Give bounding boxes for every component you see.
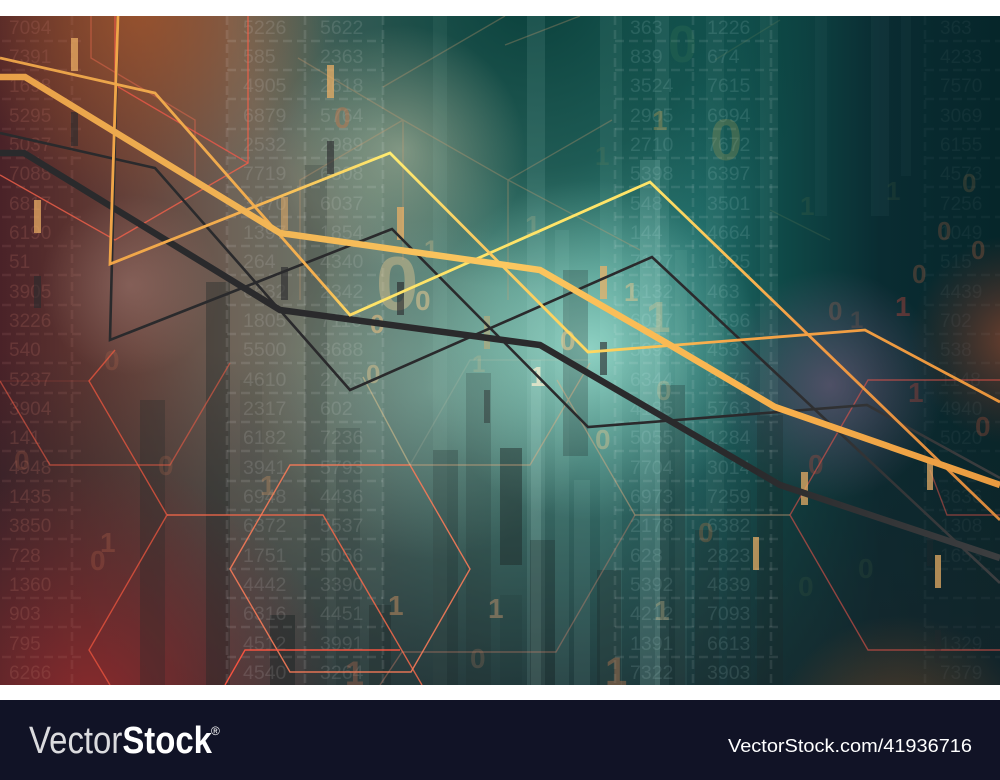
number table centre-left: 4442 [243,574,286,596]
number table centre-right: 839 [630,46,663,68]
number table centre-right: 3014 [707,457,751,479]
number table centre-right: 363 [630,17,663,39]
number table left: 6817 [9,194,51,215]
number table centre-left: 2618 [320,75,363,97]
number table right: 7256 [940,194,982,215]
number table centre-left: 5764 [320,105,364,127]
number table centre-right: 7259 [707,486,750,508]
binary digits overlay: 1 [488,593,504,624]
binary digits overlay: 0 [962,168,976,198]
binary digits overlay: 1 [654,595,670,626]
number table right [940,18,982,684]
binary digits overlay: 0 [595,424,611,455]
number table left: 5037 [9,135,51,156]
number table left: 540 [9,340,41,361]
number table centre-left: 7236 [320,427,363,449]
number table right: 1049 [940,223,982,244]
number table centre-right: 4839 [707,574,750,596]
number table left: 6266 [9,663,51,684]
number table centre-left: 7719 [243,163,286,185]
number table centre-left: 2989 [320,134,363,156]
number table centre-left: 6879 [243,105,286,127]
number table left: 141 [9,428,41,449]
number table centre-right: 7322 [630,662,673,684]
number table centre-right: 1391 [630,633,673,655]
number table right: 1329 [940,634,982,655]
number table centre-right: 2178 [630,515,673,537]
number table centre-left: 6037 [320,193,363,215]
number table centre-right: 4664 [707,222,751,244]
number table left: 51 [9,252,30,273]
number table centre-right: 4185 [630,398,674,420]
number table centre-left: 6308 [320,163,363,185]
number table centre-right [630,17,751,684]
number table centre-left: 1751 [243,545,286,567]
number table right: 4439 [940,282,982,303]
number table centre-left: 6372 [243,515,286,537]
number table right: 702 [940,311,972,332]
binary digits overlay: 0 [710,108,742,173]
binary digits overlay: 0 [14,445,30,476]
number table centre-left: 1805 [243,310,287,332]
number table centre-right: 5693 [630,339,673,361]
dashed table grid [2,16,778,683]
number table left: 1360 [9,575,51,596]
binary digits overlay: 0 [975,411,991,442]
number table centre-left: 4540 [243,662,287,684]
number table left: 1698 [9,76,51,97]
binary digits overlay: 0 [90,545,106,576]
binary digits overlay: 1 [624,277,638,307]
number table left: 5237 [9,370,51,391]
number table centre-right: 4212 [630,603,673,625]
binary digits overlay: 0 [366,359,380,389]
number table left: 7094 [9,18,52,39]
binary digits overlay: 1 [595,141,609,171]
footer image id: VectorStock.com/41936716 [728,736,972,756]
number table centre-left: 6182 [243,427,286,449]
binary digits overlay: 0 [698,517,714,548]
number table centre-right: 5398 [630,163,673,185]
binary digits overlay: 1 [605,650,627,694]
thick dark trend line [0,153,1000,558]
number table centre-right: 2710 [630,134,674,156]
number table centre-left: 3390 [320,574,364,596]
number table centre-left: 5793 [320,457,363,479]
number table centre-left: 2755 [320,369,364,391]
number table centre-left: 4451 [320,603,363,625]
number table left: 903 [9,604,41,625]
number table left: 7088 [9,164,51,185]
number table centre-left: 5500 [243,339,287,361]
binary digits overlay: 1 [800,191,814,221]
number table centre-right: 6973 [630,486,673,508]
binary digits overlay: 1 [908,377,924,408]
number table centre-right: 463 [707,281,740,303]
number table centre-right: 1226 [707,17,750,39]
number table centre-left: 3941 [243,457,286,479]
vertical light streaks [230,16,778,685]
number table left: 3850 [9,516,51,537]
binary digits overlay: 1 [345,655,364,693]
number table centre-left: 602 [320,398,353,420]
footer bar [0,700,1000,780]
number table centre-left: 2363 [320,46,363,68]
number table right: 1308 [940,516,982,537]
thin orange line chart [0,16,1000,520]
number table centre-right: 7672 [707,134,750,156]
binary digits overlay: 0 [104,345,120,376]
number table left: 7391 [9,47,51,68]
number table centre-left: 5622 [320,17,363,39]
number table centre-left: 2532 [243,134,286,156]
number table centre-left: 4436 [320,486,363,508]
binary digits overlay: 1 [424,236,438,264]
number table left: 5295 [9,106,51,127]
number table centre-left: 6632 [243,281,286,303]
number table centre-left: 1854 [320,222,364,244]
binary digits overlay: 1 [525,210,541,241]
number table left: 3904 [9,399,52,420]
number table centre-left: 2317 [243,398,286,420]
number table right: 6155 [940,135,982,156]
number table centre-left: 6316 [243,603,286,625]
number table right: 7379 [940,663,982,684]
binary digits overlay: 1 [652,105,668,136]
binary digits overlay: 1 [646,293,670,342]
binary digits overlay: 0 [656,375,672,406]
number table centre-right: 628 [630,545,663,567]
number table centre-left: 4610 [243,369,287,391]
number table centre-right: 7127 [630,251,673,273]
number table centre-left: 264 [243,251,276,273]
number table centre-right: 2905 [630,105,674,127]
number table centre-right: 6382 [707,515,750,537]
number table centre-left: 1397 [243,222,286,244]
number table centre-left: 3991 [320,633,363,655]
number table centre-right: 7615 [707,75,751,97]
binary digits overlay: 0 [470,643,486,674]
number table right: 5020 [940,428,982,449]
binary digits overlay: 0 [415,285,431,316]
number table right: 4573 [940,164,982,185]
thin dark line chart [0,16,1000,583]
number table centre-left: 5537 [320,515,363,537]
binary digits overlay: 1 [530,361,546,392]
number table left: 3905 [9,282,51,303]
number table centre-left: 7116 [320,310,362,332]
binary digits overlay: 1 [388,590,404,621]
number table centre-right: 1596 [707,310,750,332]
binary digits overlay: 0 [798,571,814,602]
registered mark: ® [211,724,220,738]
number table centre-right: 548 [630,193,663,215]
binary digits overlay: 0 [828,296,842,326]
number table centre-left: 5056 [320,545,363,567]
number table centre-left: 2342 [320,281,363,303]
binary digits overlay: 1 [895,291,911,322]
number table centre-right: 1284 [707,427,751,449]
number table centre-right: 5763 [707,398,750,420]
number table right: 1148 [940,370,981,391]
number table right: 3636 [940,487,982,508]
number table left: 795 [9,634,41,655]
number table centre-right: 3903 [707,662,750,684]
number table right: 7570 [940,76,982,97]
number table centre-right: 6994 [707,105,751,127]
number table left: 1435 [9,487,51,508]
binary digits overlay: 0 [376,242,418,327]
number table centre-right: 5392 [630,574,673,596]
number table centre-left: 4905 [243,75,287,97]
number table centre-right: 144 [630,222,663,244]
binary digits overlay: 1 [886,176,900,206]
number table centre-right: 7093 [707,603,750,625]
number table centre-left: 4512 [243,633,286,655]
number table centre-left: 3264 [320,662,364,684]
number table centre-left: 3470 [243,193,287,215]
number table right: 3069 [940,106,982,127]
number table centre-right: 6132 [630,281,673,303]
number table centre-right: 3524 [630,75,674,97]
number table centre-right: 6397 [707,163,750,185]
number table left: 6190 [9,223,51,244]
binary digits overlay: 0 [158,450,174,481]
number table left [9,18,52,684]
binary digits overlay: 1 [850,307,863,334]
number table centre-right: 2823 [707,545,750,567]
number table right: 4233 [940,47,982,68]
number table centre-right: 3175 [707,369,751,391]
bar chart: dark columns [140,165,783,685]
number table centre-right: 674 [707,46,740,68]
number table centre-left [243,17,364,684]
number table right: 1653 [940,546,982,567]
binary digits overlay: 0 [560,325,576,356]
binary digits overlay: 1 [260,470,276,501]
binary digits overlay: 0 [858,553,874,584]
footer logo: VectorStock [29,720,213,762]
number table centre-left: 3688 [320,339,363,361]
binary digits overlay: 0 [334,102,351,135]
binary digits overlay: 0 [971,235,985,265]
number table centre-left: 4340 [320,251,364,273]
binary digits overlay: 0 [668,16,697,74]
number table centre-right: 6613 [707,633,750,655]
number table right: 4940 [940,399,982,420]
binary digits overlay: 0 [808,449,824,480]
number table centre-right: 7704 [630,457,674,479]
number table centre-right: 453 [707,339,740,361]
binary digits overlay: 1 [100,527,116,558]
number table left: 3226 [9,311,51,332]
binary digits overlay: 1 [472,351,485,378]
number table centre-right: 6344 [630,369,674,391]
number table centre-left: 5226 [243,17,286,39]
number table centre-right: 6037 [630,310,673,332]
number table left: 4948 [9,458,51,479]
thick orange trend line [0,77,1000,485]
candlestick ticks: orange [34,38,941,588]
binary digits overlay: 0 [370,309,384,339]
number table centre-left: 585 [243,46,276,68]
binary digits overlay: 0 [912,259,926,289]
candlestick ticks: dark [34,112,941,663]
number table centre-right: 5055 [630,427,674,449]
binary digits overlay: 0 [937,216,951,246]
number table right: 363 [940,18,972,39]
number table centre-right: 3501 [707,193,750,215]
number table centre-left: 6948 [243,486,286,508]
number table right: 538 [940,340,972,361]
number table centre-right: 1925 [707,251,751,273]
number table left: 728 [9,546,41,567]
number table right: 515 [940,252,972,273]
